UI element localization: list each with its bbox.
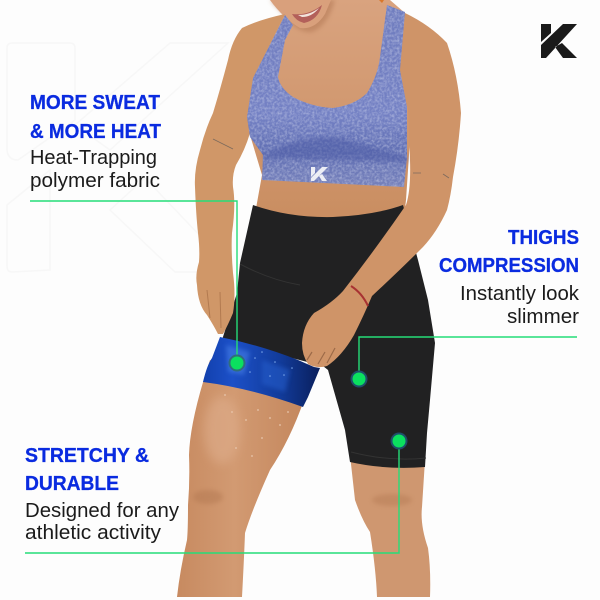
right knee shadow [372,494,412,506]
shorts hem seam [351,452,426,459]
callout: thighs compression: slimmer [507,306,579,328]
callout: thighs compression [439,227,580,328]
band highlights [226,345,250,375]
callout: more sweat and more heat: MORE SWEAT [30,92,160,114]
callout: more sweat and more heat [30,92,161,192]
arm tattoos [213,139,449,178]
shorts [222,205,435,468]
callout: stretchy and durable: STRETCHY & [25,445,149,467]
callout: thighs compression: Instantly look [460,283,580,305]
right hand fingers detail [307,348,335,364]
callout: more sweat and more heat: Heat-Trapping [30,147,157,169]
left leg [177,360,304,597]
callout: stretchy and durable: athletic activity [25,522,161,544]
hair tip [379,0,384,3]
leader line: compression [359,337,577,379]
figure: woman wearing shorts and thigh band [177,0,461,597]
left arm and hand [195,14,285,334]
neck shadow under chin [270,0,335,32]
marker dot: durable [390,432,408,450]
callout: more sweat and more heat: & MORE HEAT [30,121,161,143]
callout: stretchy and durable [25,445,179,544]
marker dot: band [228,354,246,372]
left leg highlight [204,396,240,464]
lips [292,5,322,23]
callout: stretchy and durable: Designed for any [25,500,179,522]
faint background K watermark [7,43,228,272]
bra mesh underband [263,137,407,162]
teeth [298,8,319,17]
marker dot: compression [350,370,368,388]
left hand fingers detail [207,290,221,328]
right arm and hand [302,13,461,367]
torso and neck skin [250,0,412,225]
bra mottled texture [245,0,415,190]
bra K logo [311,167,328,181]
bracelet [351,286,368,306]
callout: more sweat and more heat: polymer fabric [30,170,160,192]
chin and smile [270,0,331,28]
right leg [350,455,430,597]
callout: thighs compression: COMPRESSION [439,255,579,277]
leader line: band [30,201,237,363]
sports bra [247,5,407,187]
logo: K mark [541,24,577,58]
band droplets [249,351,293,377]
sweat droplets [224,394,289,457]
shorts waistband seam [240,264,300,285]
knee shadow [193,490,223,504]
callout: stretchy and durable: DURABLE [25,473,119,495]
callout: thighs compression: THIGHS [508,227,579,249]
thigh band [203,337,320,407]
leader line: durable [25,441,399,553]
